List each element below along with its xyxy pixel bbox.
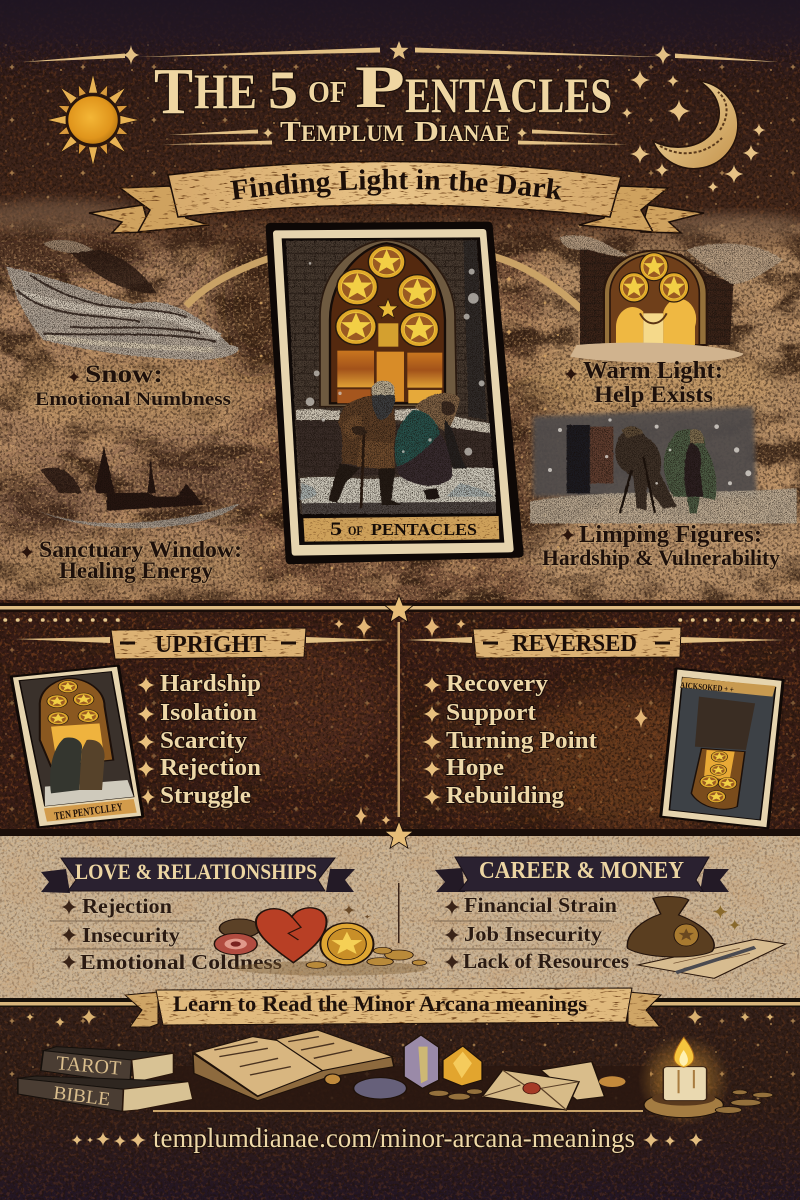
callout: warm light: Warm Light: <box>583 358 723 384</box>
banner: love and relationships: LOVE & RELATIONSHIPS <box>75 859 317 884</box>
banner: career and money: CAREER & MONEY <box>479 858 684 884</box>
list: reversed meanings <box>422 671 597 809</box>
gold arc right <box>492 256 582 310</box>
card art: hooded woman figure <box>395 393 467 500</box>
list: love <box>61 894 282 974</box>
subtitle: T <box>280 116 301 148</box>
title: T <box>154 55 193 128</box>
list: upright meanings: Scarcity <box>160 728 247 754</box>
card title text: 5 <box>330 519 342 540</box>
url sparkles <box>72 1132 703 1148</box>
reversed tarot card <box>661 668 783 828</box>
callout: limping figures: Hardship & Vulnerability <box>542 545 780 570</box>
card title text: OF <box>348 523 363 538</box>
list: reversed meanings: Turning Point <box>446 728 597 754</box>
banner: upright <box>15 628 388 659</box>
list: upright meanings: Struggle <box>160 783 251 809</box>
book titles: BIBLE <box>52 1083 111 1110</box>
illustration: candle <box>638 1034 773 1126</box>
reversed card caption: AICKSOKED + + <box>680 680 734 694</box>
footer background <box>0 998 800 1200</box>
illustration: books <box>18 1047 193 1111</box>
icon: sun <box>47 74 139 166</box>
list: upright meanings <box>137 671 261 809</box>
card title strip <box>303 516 499 542</box>
illustration: snow drifts <box>7 240 238 360</box>
book titles: TAROT <box>55 1052 122 1080</box>
card art: stained glass window <box>320 240 457 407</box>
upright card caption: TEN PENTCLLEY <box>53 801 124 823</box>
title: P <box>355 54 405 120</box>
sparkles around divider <box>334 616 648 826</box>
banner: reversed: REVERSED <box>512 631 637 657</box>
list: reversed meanings: Support <box>446 700 536 726</box>
banner: learn to read: Learn to Read the Minor Arcana meanings <box>173 991 587 1016</box>
shelf <box>150 1066 650 1112</box>
icon: broken heart, rose and coin <box>214 905 429 976</box>
upright tarot card <box>11 666 143 827</box>
illustration: open book <box>193 1030 394 1101</box>
list: love: Rejection <box>82 894 172 918</box>
callout: sanctuary window: Sanctuary Window: <box>39 537 242 562</box>
list: reversed meanings: Rebuilding <box>446 783 564 809</box>
callout: snow <box>35 361 231 410</box>
list: career: Job Insecurity <box>464 922 603 946</box>
list: love: Emotional Coldness <box>80 950 282 974</box>
card art: old man figure <box>328 381 402 508</box>
list: upright meanings: Hardship <box>160 671 261 697</box>
banner: finding light in the dark: Finding Light in the Dark <box>230 168 562 200</box>
subtitle <box>280 116 510 148</box>
icon: crescent moon with stars <box>622 70 766 192</box>
callout: sanctuary window: Healing Energy <box>59 558 213 583</box>
callout: limping figures <box>542 522 780 570</box>
list: upright meanings: Rejection <box>160 755 261 781</box>
subtitle flourishes <box>162 128 628 144</box>
star divider middle <box>385 821 413 848</box>
illustration: warm light window <box>560 235 783 363</box>
subtitle: D <box>414 116 439 148</box>
title <box>154 54 612 128</box>
callout: snow: Snow: <box>85 361 163 388</box>
card frame <box>270 226 519 560</box>
illustration: limping figures <box>530 407 797 523</box>
list: upright meanings: Isolation <box>160 700 257 726</box>
list: career: Lack of Resources <box>463 949 629 973</box>
card art: falling snow <box>306 262 485 456</box>
list: career: Financial Strain <box>464 893 617 917</box>
illustration: crystals and stone <box>354 1035 483 1100</box>
callout: warm light <box>564 358 723 407</box>
footer url: templumdianae.com/minor-arcana-meanings <box>153 1123 635 1153</box>
banner: love and relationships <box>41 858 355 893</box>
title: HE <box>194 63 257 119</box>
callout: snow: Emotional Numbness <box>35 389 231 410</box>
title: 5 <box>268 60 298 120</box>
callout: warm light: Help Exists <box>594 382 713 407</box>
panel: parchment love and career <box>0 836 800 1000</box>
subtitle: EMPLUM <box>301 121 404 146</box>
list: reversed meanings: Recovery <box>446 671 548 697</box>
callout: limping figures: Limping Figures: <box>579 522 762 548</box>
footer top sparkles <box>26 1009 774 1027</box>
banner: learn to read <box>125 988 661 1027</box>
illustration: sealed letter <box>482 1062 626 1110</box>
main tarot card <box>270 226 519 560</box>
callout: sanctuary window <box>20 537 242 583</box>
book titles <box>52 1052 122 1110</box>
title: ENTACLES <box>405 67 612 123</box>
card art: stone wall <box>286 240 495 514</box>
icon: money bag and letter with pen <box>627 897 786 978</box>
title: OF <box>308 74 347 109</box>
illustration: distant village <box>37 447 240 528</box>
list: reversed meanings: Hope <box>446 755 504 781</box>
list: career <box>444 893 629 973</box>
subtitle: IANAE <box>439 121 510 146</box>
banner: upright: UPRIGHT <box>155 632 266 658</box>
header texture <box>0 0 800 242</box>
banner: reversed <box>406 627 785 658</box>
banner: finding light in the dark <box>88 160 704 234</box>
top ornament rule <box>22 41 778 65</box>
card art: snowy ledge and ground <box>296 408 496 514</box>
star divider top <box>385 595 413 622</box>
banner: career and money <box>435 857 729 892</box>
gold arc left <box>186 258 270 306</box>
list: love: Insecurity <box>82 923 181 947</box>
card title text: PENTACLES <box>371 520 477 539</box>
card title text <box>330 519 477 540</box>
panel: upright and reversed background <box>0 600 800 836</box>
snowy scene background <box>0 200 800 608</box>
